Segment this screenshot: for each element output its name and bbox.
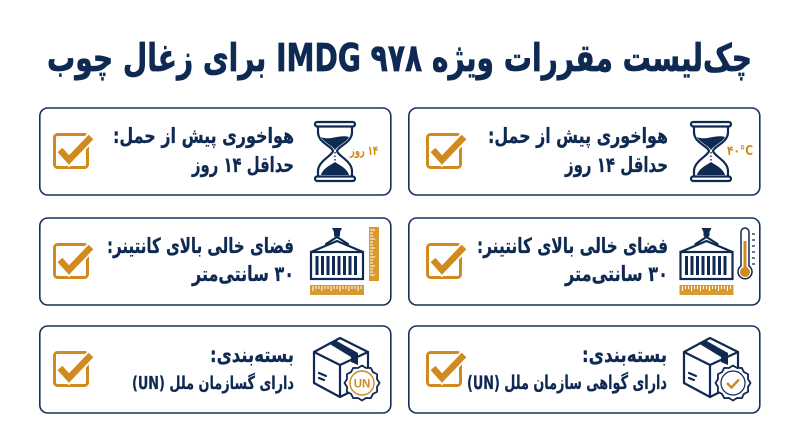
text: UN organisation: دارای گسازمان ملل (UN) xyxy=(132,372,294,394)
icon: container with ruler xyxy=(310,227,379,295)
icon: checkbox xyxy=(428,244,464,278)
icon: box with check seal xyxy=(684,338,750,400)
icon: checkbox xyxy=(54,352,91,386)
icon: hourglass with temperature: ۴۰°C xyxy=(727,144,753,159)
text: ventilation heading: هواخوری پیش از حمل: xyxy=(113,124,294,148)
text: 30 centimetres: ۳۰ سانتی‌متر xyxy=(564,262,668,286)
icon: checkbox xyxy=(428,352,464,386)
icon: checkbox xyxy=(428,134,464,168)
panel: headspace, thermometer xyxy=(409,218,760,305)
text: packaging heading: بسته‌بندی: xyxy=(582,343,667,367)
icon: checkbox xyxy=(54,244,91,278)
text: UN certificate: دارای گواهی سازمان ملل (UN) xyxy=(467,371,667,394)
text: headspace heading: فضای خالی بالای کانتینر: xyxy=(107,234,294,258)
text: minimum 14 days: حداقل ۱۴ روز xyxy=(564,153,668,177)
icon: hourglass with days: ۱۴ روز xyxy=(349,144,378,159)
icon: hourglass with temperature xyxy=(691,122,753,181)
panel: ventilation, temperature xyxy=(409,108,760,195)
text: minimum 14 days: حداقل ۱۴ روز xyxy=(191,153,294,177)
icon: checkbox xyxy=(54,134,91,168)
panel: ventilation, days xyxy=(40,108,391,195)
icon: box with UN seal xyxy=(314,338,380,400)
text: headspace heading: فضای خالی بالای کانتینر: xyxy=(477,234,668,258)
text: 30 centimetres: ۳۰ سانتی‌متر xyxy=(191,262,294,286)
panel: packaging, certificate xyxy=(409,326,760,413)
panel: headspace, ruler xyxy=(40,218,391,305)
text: packaging heading: بسته‌بندی: xyxy=(210,343,294,367)
icon: box with UN seal: UN xyxy=(354,378,370,390)
panel: packaging, UN xyxy=(40,326,391,413)
icon: container with thermometer xyxy=(680,228,755,295)
text: ventilation heading: هواخوری پیش از حمل: xyxy=(488,124,668,148)
icon: hourglass with days xyxy=(315,122,378,181)
